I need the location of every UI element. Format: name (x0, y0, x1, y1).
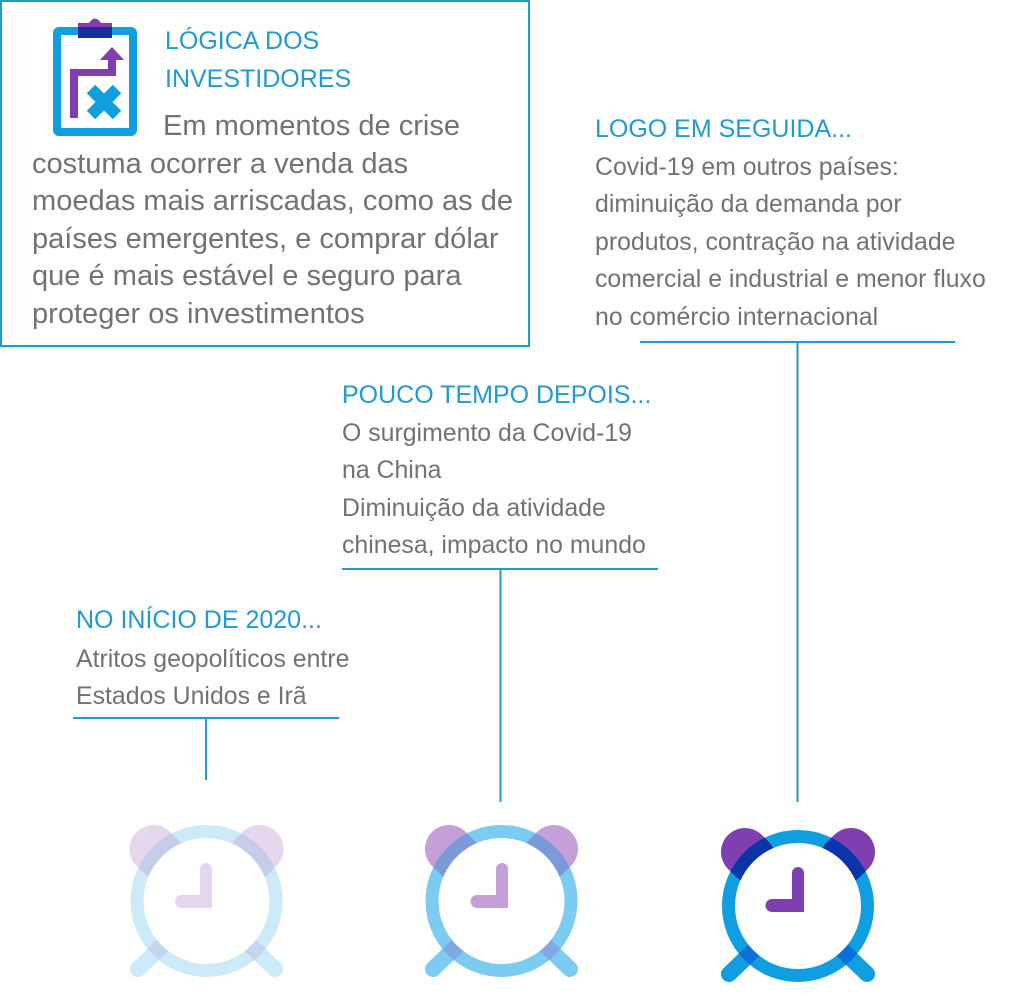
text block: pouco tempo depois: chinesa, impacto no mundo (342, 532, 646, 559)
text block: pouco tempo depois (342, 381, 651, 559)
connector: pouco tempo depois (342, 569, 658, 802)
panel heading: INVESTIDORES (165, 65, 351, 93)
text block: pouco tempo depois: na China (342, 457, 442, 484)
connector: logo em seguida (640, 342, 955, 802)
panel body text: países emergentes, e comprar dólar (32, 223, 499, 255)
text block: no início de 2020: Atritos geopolíticos entre (76, 646, 349, 673)
text block: logo em seguida: no comércio internacional (595, 304, 878, 331)
text block: logo em seguida: comercial e industrial e menor fluxo (595, 266, 986, 293)
icon: clock, full colour (728, 836, 868, 976)
panel: lógica dos investidores (1, 1, 529, 346)
text block: pouco tempo depois: Diminuição da atividade (342, 495, 606, 522)
text block: no início de 2020 (76, 605, 349, 710)
panel heading: LÓGICA DOS (165, 26, 319, 55)
panel heading (165, 26, 351, 93)
text block: pouco tempo depois: POUCO TEMPO DEPOIS... (342, 381, 651, 409)
text block: no início de 2020: NO INÍCIO DE 2020... (76, 605, 322, 634)
panel body text: costuma ocorrer a venda das (32, 148, 408, 180)
text block: no início de 2020: Estados Unidos e Irã (76, 683, 307, 710)
text block: pouco tempo depois: O surgimento da Covid-19 (342, 420, 632, 447)
text block: logo em seguida: LOGO EM SEGUIDA... (595, 115, 852, 143)
panel body text: Em momentos de crise (163, 110, 460, 142)
icon: clock, medium (432, 832, 571, 970)
icon: clipboard with arrow and cross (57, 18, 133, 132)
text block: logo em seguida (595, 115, 986, 331)
panel body text: moedas mais arriscadas, como as de (32, 185, 513, 217)
text block: logo em seguida: Covid-19 em outros países: (595, 154, 899, 181)
panel body text: que é mais estável e seguro para (32, 260, 462, 292)
panel body text (32, 110, 513, 330)
text block: logo em seguida: diminuição da demanda por (595, 191, 902, 218)
text block: logo em seguida: produtos, contração na atividade (595, 229, 955, 256)
panel body text: proteger os investimentos (32, 298, 365, 330)
connector: no início de 2020 (73, 718, 339, 780)
icon: clock, faint (137, 832, 276, 970)
